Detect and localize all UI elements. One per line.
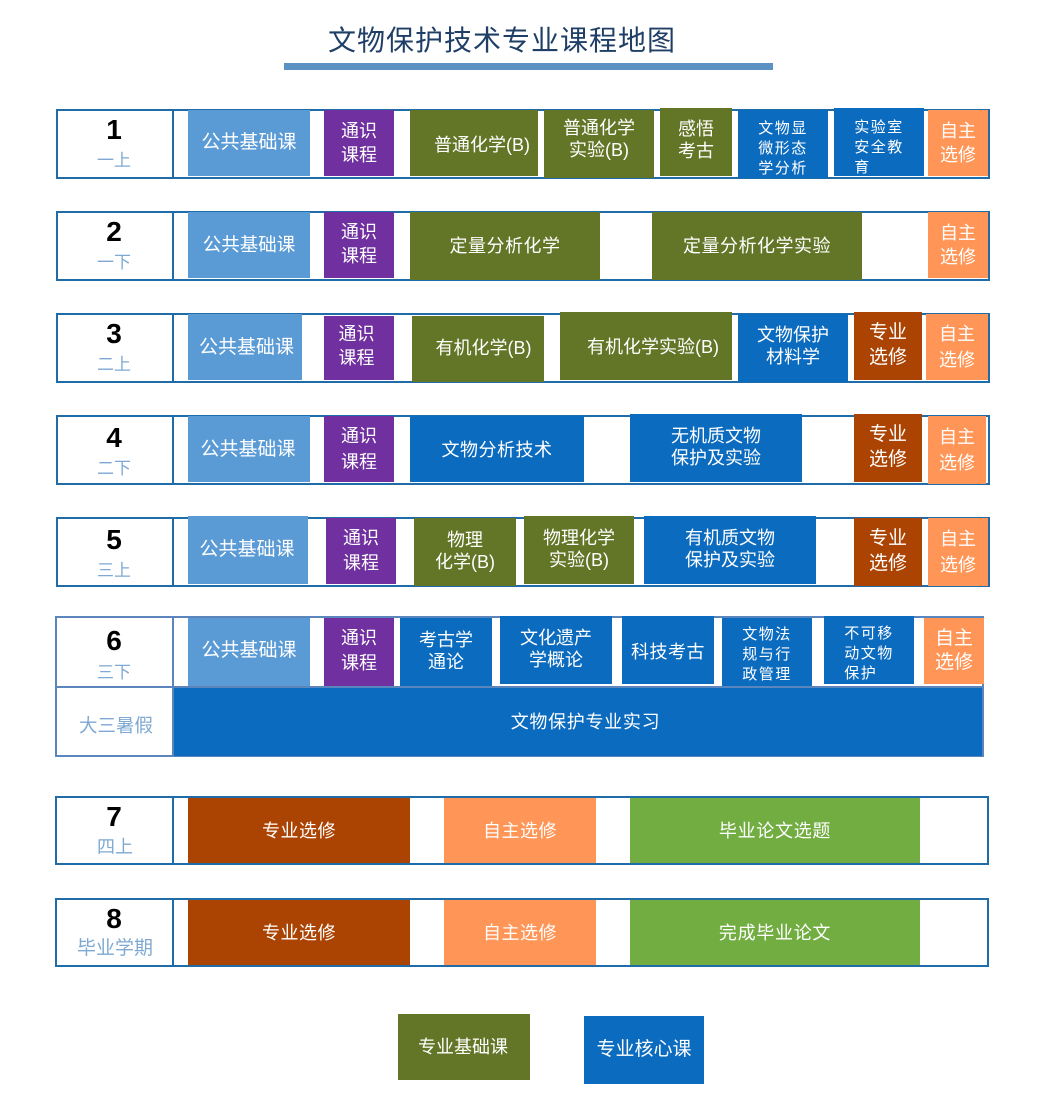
panel: semester 1 [56,109,990,179]
panel: semester 3 [56,313,990,383]
course: 通识课程: 课程 [341,653,377,673]
course: 考古学通论: 考古学 [419,630,473,650]
semester label 2: 2 [106,216,122,247]
course: 自主选修: 选修 [939,453,975,473]
course: 实验室安全教育: 育 [854,159,871,176]
panel: semester 4 [56,415,990,485]
course: 自主选修: 自主 [940,223,976,243]
course: 专业选修 [854,518,922,586]
course: 通识课程: 通识 [338,324,374,344]
course: 自主选修 [928,212,988,278]
course: 通识课程: 通识 [341,628,377,648]
course: 完成毕业论文: 完成毕业论文 [719,922,831,942]
semester name 6: 三下 [97,663,131,682]
course: 专业选修 [854,312,922,380]
course: 通识课程 [324,416,394,482]
semester name 7: 四上 [97,837,133,857]
course: 实验室安全教育: 实验室 [854,119,904,136]
course: 文物保护材料学 [738,314,848,382]
course: 自主选修 [926,314,988,380]
course: 通识课程: 通识 [343,528,379,548]
course: 自主选修: 自主 [940,121,976,141]
course: 通识课程: 课程 [343,552,379,572]
course: 定量分析化学实验: 定量分析化学实验 [683,236,831,256]
panel: semester 8 [55,898,989,967]
course: 自主选修: 自主选修 [483,922,557,942]
course: 不可移动文物保护 [824,616,914,684]
course: 自主选修: 选修 [940,555,976,575]
course: 文化遗产学概论 [500,616,612,684]
course: 自主选修: 自主 [940,529,976,549]
course: 科技考古 [622,616,714,684]
course: 感悟考古: 考古 [678,140,714,160]
course: 完成毕业论文 [630,900,920,965]
semester label 8: 8 [106,903,122,934]
course: 不可移动文物保护: 不可移 [844,625,894,642]
course: 通识课程 [324,618,394,686]
semester name 5: 三上 [97,561,131,580]
course: 文物法规与行政管理: 文物法 [742,626,792,643]
course: 文物保护专业实习: 文物保护专业实习 [511,712,660,732]
course: 公共基础课 [188,212,310,278]
course: 实验室安全教育: 安全教 [854,139,904,156]
course: 专业选修: 专业 [869,424,907,445]
semester name 4: 二下 [97,459,131,478]
panel: semester 5 [56,517,990,587]
course: 普通化学(B): 普通化学(B) [434,134,530,154]
course: 物理化学实验(B) [524,516,634,584]
semester label 1: 1 [106,114,122,145]
panel: semester 6 [55,616,984,757]
course: 文物显微形态学分析: 文物显 [758,120,808,137]
course: 公共基础课 [188,314,302,380]
course: 通识课程: 课程 [341,246,377,266]
course: 文物法规与行政管理 [722,618,812,686]
course: 自主选修: 自主 [939,324,975,344]
course: 自主选修: 自主选修 [483,820,557,840]
course: 通识课程: 通识 [341,426,377,446]
course: 专业选修: 选修 [869,552,907,574]
summer term label: 大三暑假 [79,715,153,736]
course: 自主选修: 选修 [940,247,976,267]
course: 自主选修 [928,416,986,484]
course: 定量分析化学 [410,212,600,280]
course: 实验室安全教育 [834,108,924,176]
course: 通识课程: 课程 [341,452,377,472]
course: 专业选修: 专业选修 [262,922,336,942]
semester label 7: 7 [106,801,122,832]
legend: 专业基础课: 专业基础课 [418,1036,508,1056]
course: 自主选修 [928,518,988,586]
panel: semester 2 [56,211,990,281]
course: 文物保护材料学: 文物保护 [757,324,829,344]
course: 自主选修: 自主 [935,628,973,648]
legend: 专业核心课: 专业核心课 [596,1039,692,1060]
course: 科技考古: 科技考古 [631,642,705,662]
course: 有机质文物保护及实验 [644,516,816,584]
course: 自主选修 [928,110,988,176]
course: 公共基础课: 公共基础课 [200,439,296,460]
course: 文物分析技术 [410,416,584,482]
course: 物理化学(B) [414,518,516,586]
course: 不可移动文物保护: 动文物 [844,645,894,662]
legend: 专业核心课 [584,1016,704,1084]
course: 文化遗产学概论: 文化遗产 [520,628,592,648]
course: 文物保护专业实习 [174,688,982,756]
course: 公共基础课: 公共基础课 [201,640,296,660]
course: 普通化学实验(B): 实验(B) [569,140,629,160]
course: 有机质文物保护及实验: 有机质文物 [685,528,775,548]
course: 有机化学(B): 有机化学(B) [436,338,532,358]
semester name 3: 二上 [97,355,131,374]
course: 物理化学(B): 物理 [447,530,483,550]
course: 无机质文物保护及实验: 无机质文物 [671,426,761,446]
title: 文物保护技术专业课程地图 [328,25,676,56]
course: 通识课程 [326,518,396,584]
course: 有机质文物保护及实验: 保护及实验 [685,550,775,570]
course: 通识课程 [324,212,394,278]
course: 文物分析技术: 文物分析技术 [442,440,552,460]
course: 专业选修: 专业选修 [262,820,336,840]
course: 自主选修: 自主 [939,427,975,447]
course: 通识课程: 通识 [341,121,377,141]
course: 公共基础课: 公共基础课 [201,132,296,153]
course: 自主选修: 选修 [940,145,976,165]
semester label 6: 6 [106,625,122,656]
course: 公共基础课: 公共基础课 [199,337,294,358]
course: 专业选修: 专业 [869,322,907,343]
course: 文物法规与行政管理: 规与行 [742,646,792,663]
course: 考古学通论: 通论 [428,652,464,672]
course: 通识课程: 课程 [338,348,374,368]
course: 公共基础课 [188,110,310,176]
course: 定量分析化学: 定量分析化学 [450,236,560,256]
course: 专业选修 [188,798,410,863]
course: 自主选修 [444,900,596,965]
course: 公共基础课: 公共基础课 [199,539,294,560]
course: 通识课程: 课程 [341,145,377,165]
course: 毕业论文选题 [630,798,920,863]
semester label 3: 3 [106,318,122,349]
course: 自主选修 [444,798,596,863]
course: 专业选修: 专业 [869,528,907,548]
course: 公共基础课 [188,416,310,482]
course: 通识课程: 通识 [341,222,377,242]
course: 专业选修: 选修 [869,347,907,368]
semester label 5: 5 [106,524,122,555]
course: 文物显微形态学分析: 学分析 [758,160,808,177]
semester name 1: 一上 [97,151,131,170]
course: 自主选修: 选修 [939,350,975,370]
course: 通识课程 [324,110,394,176]
course: 文物保护材料学: 材料学 [766,346,820,366]
semester name 2: 一下 [97,253,131,272]
course: 专业选修: 选修 [869,449,907,470]
course: 文化遗产学概论: 学概论 [529,650,583,670]
course: 文物显微形态学分析: 微形态 [758,140,808,157]
course: 专业选修 [854,414,922,482]
course: 有机化学实验(B) [560,312,732,380]
course: 物理化学实验(B): 实验(B) [549,550,609,570]
course: 有机化学实验(B): 有机化学实验(B) [587,337,719,357]
semester label 4: 4 [106,422,122,453]
course: 专业选修 [188,900,410,965]
course: 自主选修 [924,618,984,684]
course: 定量分析化学实验 [652,212,862,280]
course: 无机质文物保护及实验 [630,414,802,482]
course: 公共基础课: 公共基础课 [203,234,295,255]
semester name 8: 毕业学期 [77,938,153,959]
course: 普通化学实验(B): 普通化学 [563,118,635,138]
course: 自主选修: 选修 [935,652,973,672]
course: 公共基础课 [188,516,308,584]
course: 毕业论文选题: 毕业论文选题 [719,820,831,840]
course: 有机化学(B) [412,316,544,382]
course: 不可移动文物保护: 保护 [844,665,877,682]
course: 感悟考古 [660,108,732,176]
panel: semester 7 [55,796,989,865]
course: 公共基础课 [188,618,310,686]
course: 普通化学实验(B) [544,110,654,178]
course: 通识课程 [324,316,394,380]
course: 文物显微形态学分析 [738,110,828,178]
course: 考古学通论 [400,618,492,686]
legend: 专业基础课 [398,1014,530,1080]
course: 感悟考古: 感悟 [678,118,714,138]
course: 无机质文物保护及实验: 保护及实验 [671,448,761,468]
course: 物理化学(B): 化学(B) [435,552,495,572]
course: 物理化学实验(B): 物理化学 [543,528,615,548]
course: 普通化学(B) [410,110,538,176]
course: 文物法规与行政管理: 政管理 [742,666,792,683]
title underline [284,63,773,70]
